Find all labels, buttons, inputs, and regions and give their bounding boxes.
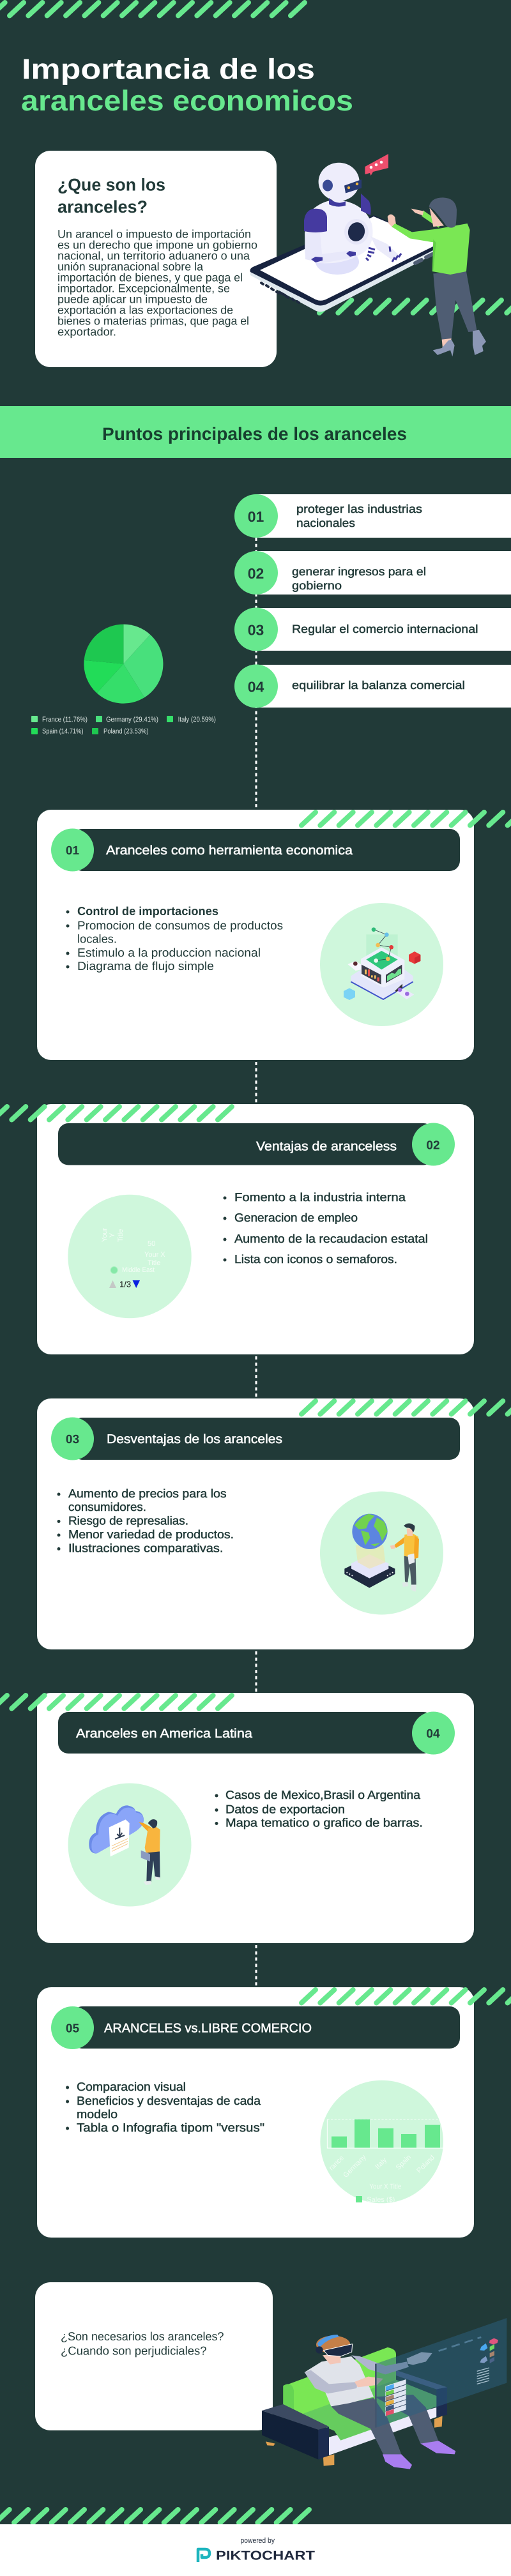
- heading: que son los aranceles: ¿Que son los: [57, 175, 165, 194]
- stripes 01: [301, 812, 511, 825]
- icon: man with VR on sofa: [262, 2318, 507, 2469]
- bar chart circle: Spain: [394, 2153, 413, 2171]
- list 03: consumidores.: [68, 1500, 146, 1513]
- chart circle: faint scatter chart: Title: [117, 1229, 125, 1242]
- stripes 05: [301, 1990, 511, 2003]
- holographic panel: [376, 2318, 507, 2428]
- key point 01: 01: [248, 508, 264, 525]
- list 01: locales.: [77, 932, 117, 945]
- list 05: modelo: [77, 2107, 118, 2121]
- heading: que son los aranceles: [57, 175, 165, 216]
- band: puntos principales: Puntos principales de los aranceles: [102, 424, 407, 444]
- panel: closing questions: ¿Son necesarios los aranceles?: [61, 2330, 224, 2343]
- icon: woman: [388, 197, 486, 356]
- panel: que son los aranceles: [35, 151, 277, 367]
- list 03: Menor variedad de productos.: [68, 1527, 234, 1541]
- title: Importancia de los: [22, 52, 315, 86]
- key point 01: [234, 494, 511, 538]
- header 01: Aranceles como herramienta economica: [106, 844, 353, 858]
- text block: definicion: exportador.: [57, 326, 116, 338]
- bar chart circle: Sales ($): [367, 2195, 395, 2203]
- list 03: Aumento de precios para los: [68, 1487, 227, 1500]
- stripes 03: [301, 1401, 511, 1414]
- header 02: [58, 1123, 455, 1166]
- key point 01: proteger las industrias: [296, 503, 422, 515]
- panel: section 02: [0, 1104, 474, 1354]
- list 02: Generacion de empleo: [234, 1211, 358, 1224]
- icon circle: globe and man: [320, 1492, 443, 1614]
- text block: definicion: puede aplicar un impuesto de: [57, 292, 208, 305]
- list 05: Comparacion visual: [77, 2080, 186, 2093]
- icon: phone: [250, 215, 434, 312]
- key point 04: equilibrar la balanza comercial: [292, 679, 465, 692]
- list 01: Control de importaciones: [77, 904, 218, 918]
- text block: definicion: exportación a las exportaciones de: [57, 304, 233, 317]
- key point 02: [234, 551, 511, 595]
- header 02: Ventajas de aranceless: [256, 1139, 397, 1153]
- chart circle: faint scatter chart: [68, 1195, 192, 1318]
- header 05: 05: [66, 2022, 79, 2036]
- list 02: Fomento a la industria interna: [234, 1190, 406, 1204]
- list 01: Diagrama de flujo simple: [77, 959, 214, 973]
- header 03: [51, 1418, 460, 1460]
- header 05: ARANCELES vs.LIBRE COMERCIO: [104, 2022, 312, 2036]
- pie legend: Spain (14.71%): [42, 728, 84, 736]
- header 04: [58, 1711, 455, 1755]
- header 03: Desventajas de los aranceles: [107, 1432, 282, 1446]
- key point 03: 03: [248, 622, 264, 639]
- key point 04: 04: [248, 678, 264, 695]
- header 01: 01: [66, 844, 79, 858]
- icon: piktochart logo: [198, 2549, 210, 2562]
- pie legend: Italy (20.59%): [178, 716, 216, 724]
- header 05: [51, 2006, 460, 2049]
- chart circle: faint scatter chart: Your X: [144, 1251, 165, 1259]
- text block: definicion: nacional, un territorio aduanero o una: [57, 249, 250, 262]
- text block: definicion: unión supranacional sobre la: [57, 261, 204, 273]
- key point 02: gobierno: [292, 579, 342, 592]
- header 04: 04: [426, 1727, 440, 1741]
- chart circle: faint scatter chart: Your: [101, 1227, 109, 1242]
- chart circle: faint scatter chart: Middle East: [122, 1266, 155, 1274]
- pie legend: Germany (29.41%): [106, 716, 158, 724]
- heading: que son los aranceles: aranceles?: [57, 197, 148, 216]
- header 04: Aranceles en America Latina: [76, 1727, 253, 1741]
- panel: section 04: [0, 1693, 474, 1943]
- list 04: Datos de exportacion: [225, 1802, 345, 1816]
- title: [21, 52, 353, 117]
- list 01: Promocion de consumos de productos: [77, 918, 283, 932]
- list 01: [66, 904, 283, 973]
- icon circle: data platform: [320, 903, 443, 1026]
- icon: robot: [304, 154, 401, 275]
- panel: section 05: [37, 1987, 511, 2238]
- key point 02: 02: [248, 565, 264, 582]
- panel: closing questions: ¿Cuando son perjudiciales?: [61, 2344, 207, 2358]
- man: [305, 2335, 455, 2469]
- icon: robot on phone with woman: [250, 154, 486, 356]
- footer: PIKTOCHART: [216, 2549, 315, 2563]
- icon circle: cloud and man: [68, 1783, 192, 1907]
- list 02: Lista con iconos o semaforos.: [234, 1252, 397, 1266]
- header 03: 03: [66, 1433, 79, 1446]
- list 05: Tabla o Infografia tipom "versus": [77, 2121, 264, 2134]
- sofa: [262, 2347, 447, 2466]
- bar chart circle: Poland: [415, 2153, 436, 2174]
- top stripes: [0, 3, 305, 15]
- key point 02: generar ingresos para el: [292, 565, 426, 578]
- title: aranceles economicos: [21, 84, 353, 117]
- header 02: 02: [426, 1139, 440, 1152]
- text block: definicion: importación de bienes, y que paga el: [57, 271, 243, 284]
- list 03: [57, 1487, 234, 1554]
- list 05: Beneficios y desventajas de cada: [77, 2094, 261, 2107]
- pie legend: [31, 716, 216, 736]
- stripes behind phone: [319, 300, 511, 313]
- chart circle: faint scatter chart: 50: [148, 1240, 155, 1248]
- key point 03: Regular el comercio internacional: [292, 623, 478, 635]
- pie chart: [84, 625, 163, 704]
- panel: section 01: [37, 810, 511, 1060]
- header 01: [51, 829, 460, 871]
- connector lines: [256, 538, 257, 1987]
- list 04: Casos de Mexico,Brasil o Argentina: [225, 1788, 421, 1801]
- panel: section 03: [37, 1398, 511, 1649]
- pie legend: Poland (23.53%): [103, 728, 149, 736]
- text block: definicion: Un arancel o impuesto de importación: [57, 227, 251, 240]
- list 03: Riesgo de represalias.: [68, 1513, 188, 1527]
- text block: definicion: [57, 227, 257, 338]
- bar chart circle: Italy: [374, 2156, 388, 2171]
- footer: powered by: [240, 2537, 275, 2545]
- list 05: [66, 2080, 264, 2134]
- band: puntos principales: [0, 406, 511, 458]
- list 03: Ilustraciones comparativas.: [68, 1542, 224, 1554]
- key point 03: [234, 608, 511, 651]
- chart circle: faint scatter chart: Y: [109, 1232, 116, 1238]
- stripes 04: [0, 1695, 232, 1709]
- key point 01: nacionales: [296, 517, 355, 529]
- chart circle: faint scatter chart: Title: [148, 1259, 160, 1267]
- text block: definicion: importador. Excepcionalmente, se: [57, 282, 230, 295]
- list 02: Aumento de la recaudacion estatal: [234, 1232, 428, 1245]
- bar chart circle: rance: [327, 2154, 345, 2172]
- pie legend: France (11.76%): [42, 716, 88, 724]
- text block: definicion: es un derecho que impone un gobierno: [57, 239, 257, 252]
- panel: closing questions: [35, 2282, 273, 2430]
- bar chart circle: Your X Title: [369, 2182, 401, 2190]
- list 02: [224, 1190, 428, 1266]
- list 04: [215, 1788, 423, 1830]
- stripes 02: [0, 1107, 232, 1120]
- key point 04: [234, 664, 511, 708]
- bottom stripes: [0, 2510, 309, 2522]
- bar chart circle: Germany: [342, 2153, 367, 2179]
- list 04: Mapa tematico o grafico de barras.: [225, 1816, 423, 1830]
- text block: definicion: bienes o materias primas, que paga el: [57, 314, 249, 327]
- chart circle: faint scatter chart: 1/3: [119, 1280, 131, 1289]
- list 01: Estimulo a la produccion nacional: [77, 946, 261, 959]
- footer: [0, 2524, 511, 2576]
- bar chart circle: [320, 2080, 444, 2203]
